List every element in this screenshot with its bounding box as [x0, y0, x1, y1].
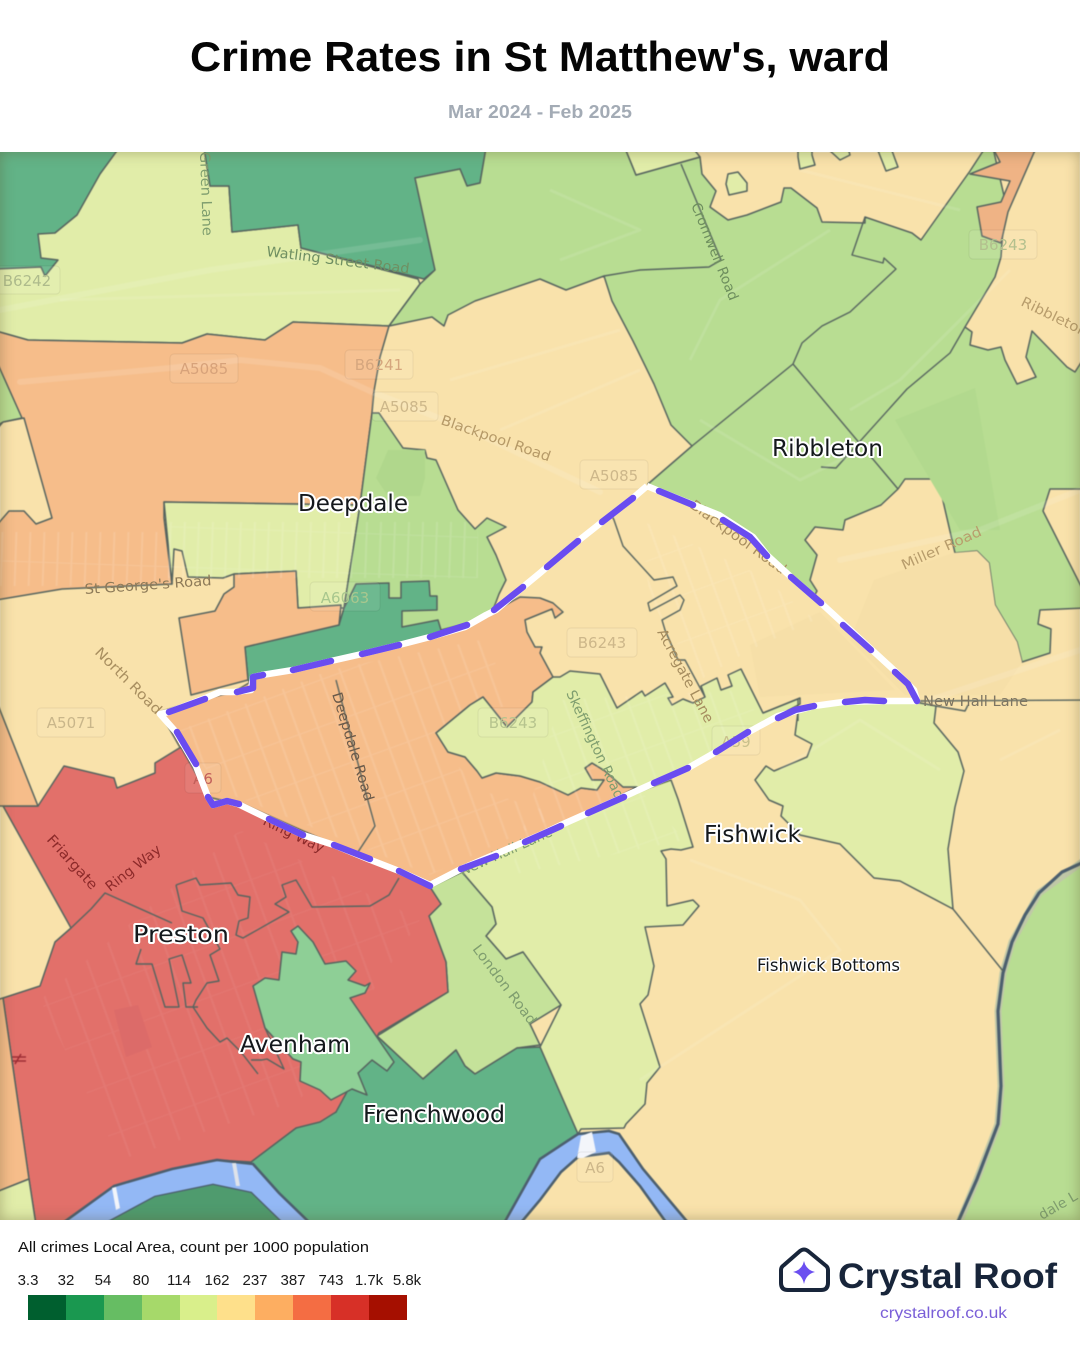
legend values: 32	[58, 1272, 74, 1289]
region: south-west pale green	[0, 1179, 36, 1225]
badge A5085 west	[170, 354, 238, 383]
badge B6241	[345, 350, 413, 379]
river: right bend	[503, 1131, 690, 1225]
legend values: 80	[133, 1272, 149, 1289]
street grid: cream residential	[648, 525, 812, 676]
violet ward dashes	[169, 491, 917, 886]
badge A6 river: A6	[585, 1159, 605, 1177]
river: left bend	[60, 1160, 312, 1225]
road: Green Lane: Green Lane	[196, 152, 215, 236]
map edge vignette	[0, 152, 1080, 1220]
legend values: 1.7k	[355, 1272, 384, 1289]
legend values: 54	[95, 1272, 111, 1289]
bridge	[112, 1187, 120, 1210]
road: Cromwell Road: Cromwell Road	[687, 201, 741, 303]
legend values: 3.3	[18, 1272, 38, 1289]
road: Blackpool Road west: Blackpool Road	[439, 413, 553, 465]
legend colour scale	[28, 1295, 407, 1320]
road: St George's Road: St George's Road	[84, 573, 212, 598]
logo: Crystal Roof	[781, 1250, 1057, 1322]
region: west mid green sliver	[0, 360, 22, 426]
bridge	[232, 1163, 240, 1186]
park below river	[103, 1185, 284, 1225]
badge A5085 east: A5085	[590, 467, 638, 485]
place: Fishwick Bottoms: Fishwick Bottoms	[757, 956, 900, 976]
road: London Road: London Road	[469, 942, 539, 1028]
badge A5085 centre	[372, 392, 438, 421]
road: Skeffington Road: Skeffington Road	[562, 688, 627, 802]
title: Crime Rates in St Matthew's, ward	[190, 33, 890, 80]
badge A5085 east	[580, 460, 648, 489]
region: London Road mid green	[377, 872, 561, 1079]
place: Ribbleton: Ribbleton	[772, 436, 883, 462]
legend values: 237	[242, 1272, 268, 1289]
badge A6	[185, 763, 221, 793]
region: eastern river green	[958, 860, 1080, 1225]
line: eastern river bank	[958, 862, 1080, 1222]
region: Deepdale west orange	[0, 322, 389, 600]
region: St Matthew's ward orange	[160, 597, 637, 887]
badge A6063: A6063	[321, 589, 369, 607]
road: Acregate Lane: Acregate Lane	[653, 626, 716, 726]
region: Fishwick east pale green	[755, 700, 964, 909]
region: top pale islands	[726, 148, 898, 195]
region: north orange	[179, 571, 341, 695]
road names	[43, 152, 1080, 1223]
badge A6063	[310, 582, 380, 611]
street grid: Deepdale terraces	[168, 522, 478, 578]
street grid: ward	[180, 640, 560, 875]
region: Ribbleton mid green	[389, 148, 1080, 662]
badge A6: A6	[193, 770, 213, 788]
road: Ring Way east: Ring Way	[260, 813, 327, 857]
choropleth map	[0, 148, 1080, 1225]
road: Friargate: Friargate	[43, 832, 100, 893]
badge B6242: B6242	[3, 272, 51, 290]
street grid: Fishwick terraces	[516, 692, 744, 872]
road: Deepdale Road: Deepdale Road	[328, 690, 377, 803]
legend values: 743	[318, 1272, 344, 1289]
street grid: city centre	[40, 830, 420, 1160]
icon: rail station	[12, 1054, 26, 1064]
legend values	[18, 1272, 422, 1289]
road badges	[0, 230, 1037, 1182]
region: Deepdale mid green	[339, 413, 506, 630]
patch: Deepdale playing field	[418, 449, 426, 452]
region: Preston city centre red	[3, 747, 448, 1225]
outlines: other boundaries	[336, 164, 1080, 971]
region: Deepdale pale green	[164, 502, 360, 608]
patch: darker cream park	[954, 550, 1022, 663]
badge A59: A59	[721, 733, 751, 751]
street grid: west Deepdale orange	[0, 532, 170, 586]
region: top-left dark green	[0, 148, 119, 276]
road: Miller Road: Miller Road	[899, 524, 984, 574]
road: Ring Way west: Ring Way	[103, 842, 164, 895]
badge B6243 right: B6243	[979, 236, 1027, 254]
website url: crystalroof.co.uk	[880, 1305, 1008, 1322]
badge B6242	[0, 266, 60, 294]
badge A5071: A5071	[47, 714, 95, 732]
badge A6 river	[577, 1152, 613, 1182]
place: Deepdale: Deepdale	[298, 491, 408, 517]
badge B6243 lower	[478, 708, 548, 737]
place: Preston: Preston	[133, 922, 229, 948]
region: top-centre dark green	[204, 148, 486, 279]
region: Frenchwood dark green	[250, 1036, 578, 1225]
region: Avenham green	[253, 926, 394, 1100]
region: north-west pale green	[0, 148, 420, 343]
icon: house with star	[781, 1250, 828, 1290]
region: top-right orange	[970, 148, 1036, 243]
road: Watling Street Road: Watling Street Road	[266, 244, 410, 278]
road: New Hall Lane east: New Hall Lane	[923, 694, 1028, 710]
road: partial name bottom right: dale L	[1036, 1188, 1080, 1223]
badge B6243 right	[969, 230, 1037, 259]
badge A5071	[37, 708, 105, 737]
badge A59	[712, 726, 760, 755]
patch: darker park area	[929, 478, 945, 504]
legend values: 162	[204, 1272, 230, 1289]
road: North Road: North Road	[91, 645, 165, 718]
bridge	[577, 1132, 596, 1158]
legend title: All crimes Local Area, count per 1000 population	[18, 1239, 369, 1256]
subtitle: date range: Mar 2024 - Feb 2025	[448, 102, 632, 122]
legend values: 5.8k	[393, 1272, 422, 1289]
region: Deepdale dark green	[245, 581, 460, 682]
badge A5085 west: A5085	[180, 360, 228, 378]
badge B6243 upper	[567, 628, 637, 657]
patch: darker cream block	[750, 612, 895, 697]
place names	[133, 436, 900, 1128]
region: top pale strip	[627, 152, 701, 176]
legend values: 114	[167, 1272, 191, 1289]
region: ward pale green centre	[436, 669, 800, 797]
map base: cream areas	[0, 152, 1080, 1220]
outlines: Preston internal boundaries	[71, 878, 399, 1074]
badge A5085 centre: A5085	[380, 398, 428, 416]
badge B6243 upper: B6243	[578, 634, 626, 652]
place: Frenchwood: Frenchwood	[363, 1102, 505, 1128]
road: New Hall Lane west: New Hall Lane	[457, 824, 555, 880]
region: Fishwick west pale green	[462, 780, 699, 1134]
place: Avenham: Avenham	[240, 1032, 350, 1058]
main roads: faint white	[0, 170, 1080, 1080]
place: Fishwick: Fishwick	[704, 822, 802, 848]
road: Blackpool Road east: Blackpool Road	[687, 497, 789, 578]
legend	[18, 1239, 422, 1320]
region: west orange slivers	[0, 700, 38, 1192]
badge B6241: B6241	[355, 356, 403, 374]
legend values: 387	[280, 1272, 306, 1289]
white ward outline	[160, 486, 917, 885]
badge B6243 lower: B6243	[489, 714, 537, 732]
wordmark: Crystal Roof	[838, 1257, 1057, 1296]
patch: car park block	[120, 1006, 148, 1049]
